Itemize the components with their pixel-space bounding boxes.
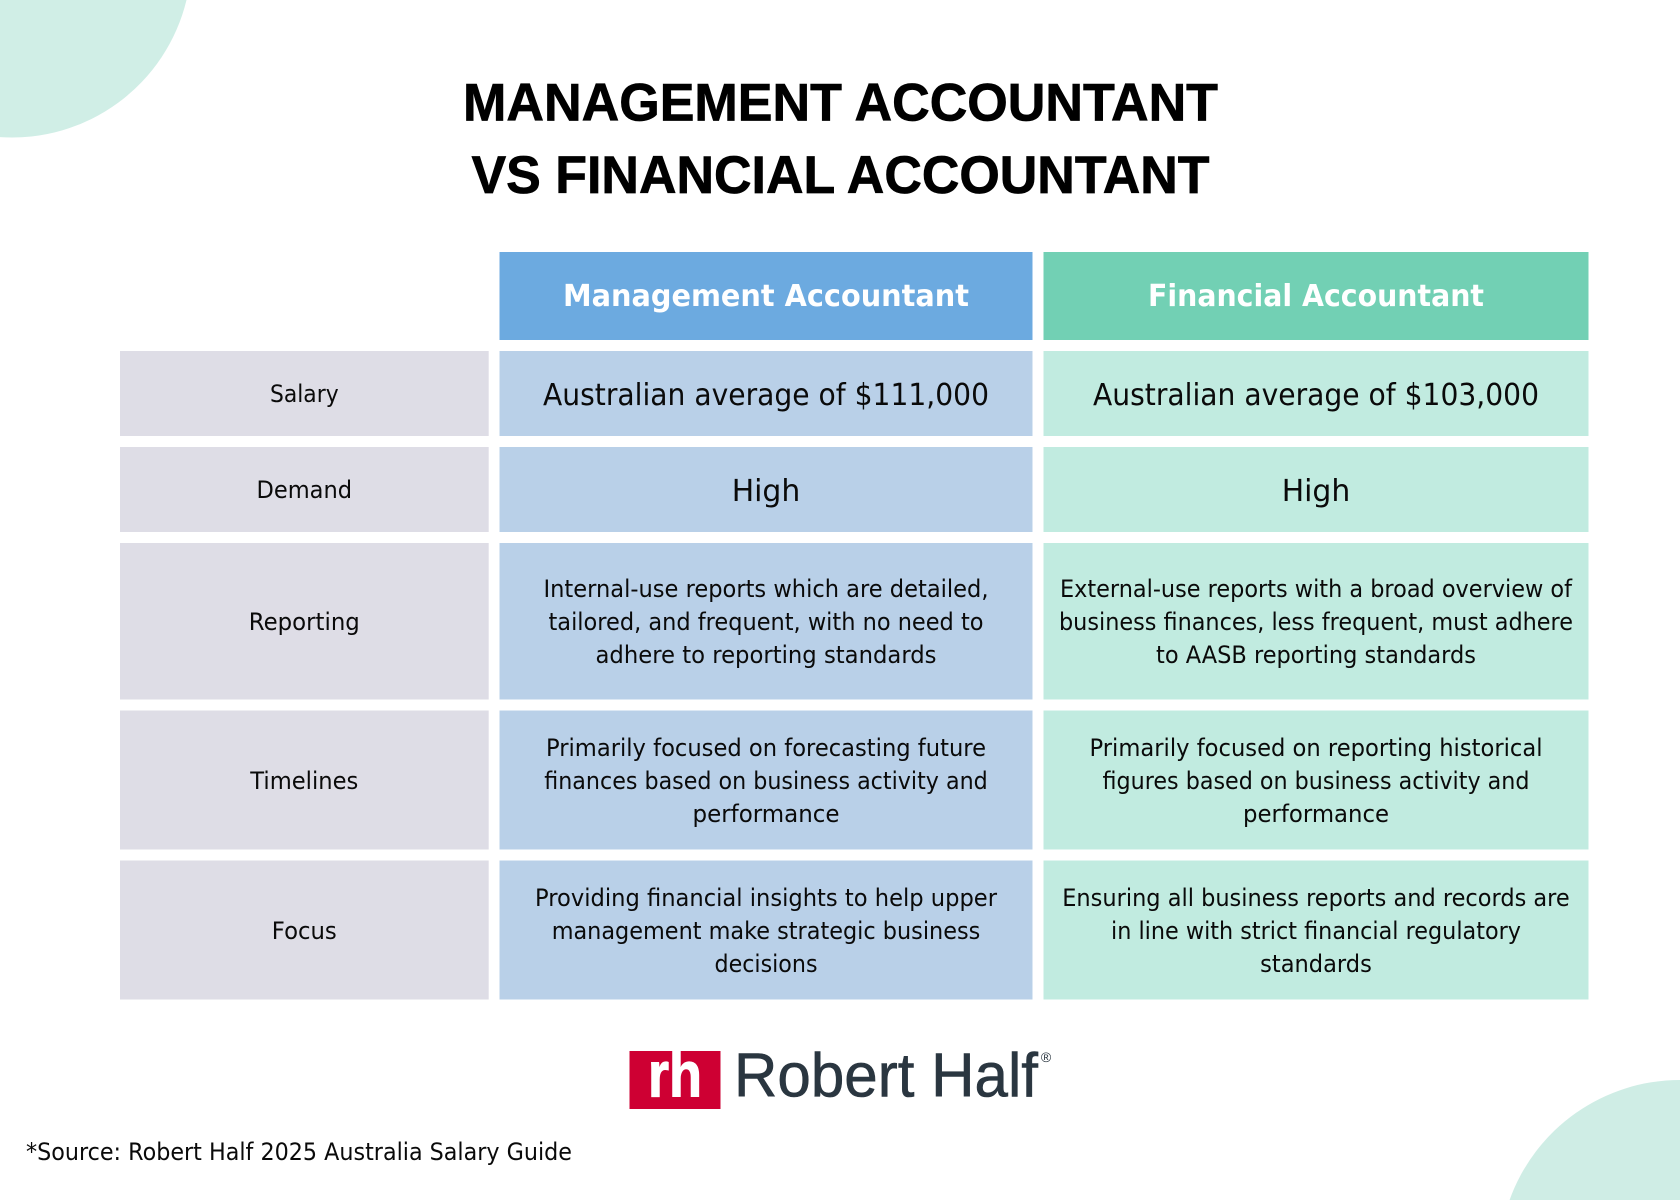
salary: management accountant	[500, 351, 1032, 436]
timelines: financial accountant: performance	[1243, 800, 1389, 828]
row label: Focus	[120, 860, 489, 1000]
focus: financial accountant: Ensuring all business reports and records are	[1062, 884, 1570, 912]
logo: Robert Half: rh	[648, 1039, 702, 1111]
row label: Demand	[120, 447, 489, 532]
reporting: financial accountant	[1044, 543, 1588, 700]
reporting: financial accountant: External-use reports with a broad overview of	[1060, 575, 1573, 603]
reporting: management accountant	[500, 543, 1032, 700]
salary: financial accountant	[1044, 351, 1588, 436]
column header: Management Accountant	[500, 252, 1032, 340]
timelines: financial accountant: Primarily focused on reporting historical	[1090, 734, 1542, 762]
reporting: financial accountant: business finances, less frequent, must adhere	[1059, 608, 1573, 636]
column header: Financial Accountant: Financial Accountant	[1148, 279, 1484, 314]
row label: Reporting	[120, 543, 489, 700]
timelines: management accountant: performance	[692, 800, 840, 828]
decorative circle: top left	[0, 0, 186, 138]
title	[463, 74, 1218, 205]
column header: Management Accountant: Management Accountant	[563, 279, 969, 314]
timelines: management accountant: Primarily focused on forecasting future	[546, 734, 986, 762]
demand: management accountant: High	[732, 474, 800, 509]
salary: management accountant: Australian average of $111,000	[543, 378, 989, 413]
timelines: financial accountant: figures based on business activity and	[1102, 767, 1530, 795]
row label: Focus: Focus	[272, 917, 337, 945]
focus: management accountant: management make strategic business	[552, 917, 980, 945]
row label: Reporting: Reporting	[249, 608, 360, 636]
focus: management accountant	[500, 860, 1032, 1000]
timelines: management accountant	[500, 710, 1032, 850]
focus: management accountant: Providing financial insights to help upper	[535, 884, 997, 912]
reporting: management accountant: Internal-use reports which are detailed,	[544, 575, 988, 603]
row label: Timelines	[120, 710, 489, 850]
timelines: financial accountant	[1044, 710, 1588, 850]
timelines: management accountant: finances based on business activity and	[544, 767, 988, 795]
focus: financial accountant: in line with strict financial regulatory	[1111, 917, 1521, 945]
row label: Demand: Demand	[257, 476, 352, 504]
title: MANAGEMENT ACCOUNTANT	[463, 74, 1218, 132]
row label: Salary	[120, 351, 489, 436]
reporting: management accountant: tailored, and frequent, with no need to	[548, 608, 984, 636]
decorative circle: bottom right	[1510, 1080, 1680, 1200]
focus: management accountant: decisions	[714, 950, 818, 978]
salary: financial accountant: Australian average of $103,000	[1093, 378, 1539, 413]
demand: financial accountant	[1044, 447, 1588, 532]
focus: financial accountant: standards	[1260, 950, 1372, 978]
source note: *Source: Robert Half 2025 Australia Salary Guide	[26, 1138, 572, 1166]
logo: Robert Half: ®	[1041, 1049, 1052, 1065]
demand: management accountant	[500, 447, 1032, 532]
row label: Salary: Salary	[270, 380, 339, 408]
focus: financial accountant	[1044, 860, 1588, 1000]
demand: financial accountant: High	[1282, 474, 1350, 509]
title: VS FINANCIAL ACCOUNTANT	[472, 146, 1210, 205]
logo: Robert Half: Robert Half	[734, 1042, 1039, 1111]
reporting: financial accountant: to AASB reporting standards	[1156, 641, 1476, 669]
row label: Timelines: Timelines	[249, 767, 358, 795]
reporting: management accountant: adhere to reporting standards	[596, 641, 936, 669]
column header: Financial Accountant	[1044, 252, 1588, 340]
